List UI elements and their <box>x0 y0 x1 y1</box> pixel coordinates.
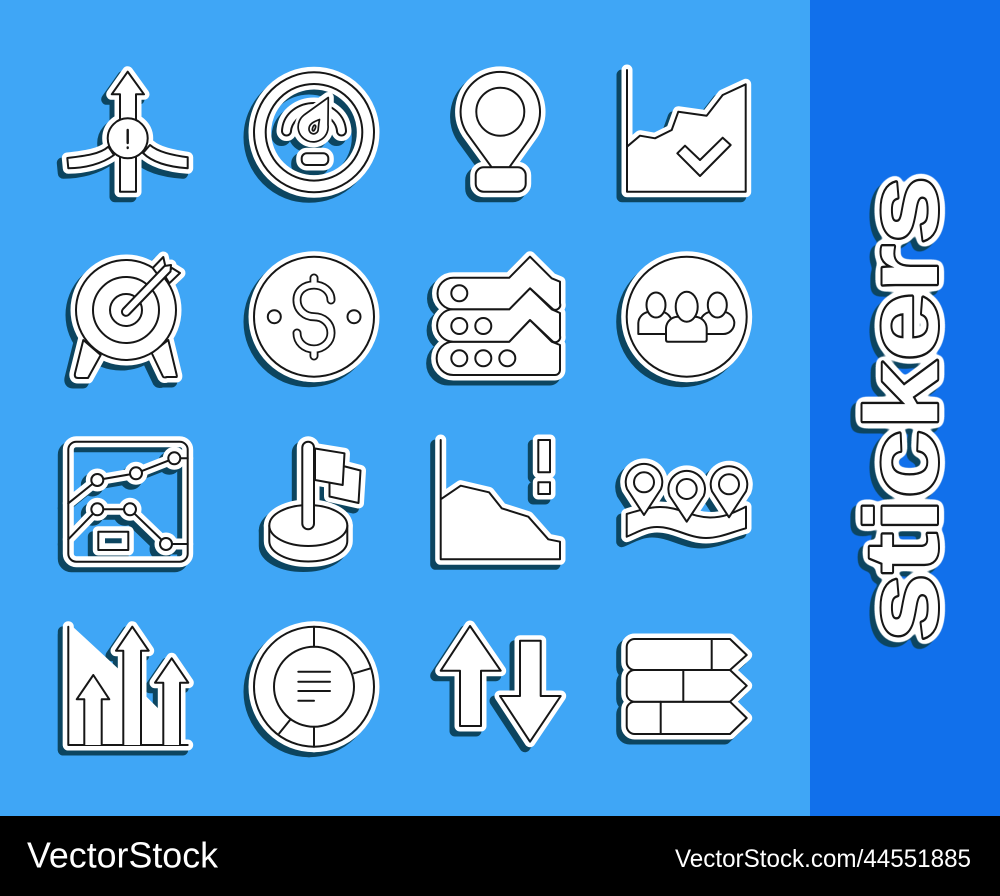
footer brand text: VectorStock <box>27 834 219 876</box>
icon: flag on round base <box>264 442 360 566</box>
icon: target with arrow <box>70 257 180 383</box>
icon: growth chart with three up arrows <box>63 627 188 750</box>
icon: rising area chart with check mark <box>622 70 746 197</box>
footer bar <box>0 816 1000 896</box>
icon: three pins on a map band <box>621 464 747 543</box>
icon: location pin <box>456 72 540 197</box>
icon: team of three people in circle <box>622 257 747 382</box>
title: stickers: stickers <box>844 176 959 642</box>
icon: three stacked tag bars <box>622 639 747 739</box>
footer image id text: VectorStock.com/44551885 <box>675 845 971 873</box>
icon: donut chart with text lines <box>249 627 374 752</box>
icon: line chart in frame <box>63 442 188 567</box>
side panel: dark blue <box>810 0 1000 816</box>
icon: merging road arrow with warning <box>62 72 188 197</box>
background panel: light blue <box>0 0 810 816</box>
icon: dollar coin <box>249 257 374 382</box>
icon: up and down arrows <box>436 626 561 747</box>
icon: falling area chart with exclamation <box>436 440 560 564</box>
icon: gauge inside ring <box>249 72 374 197</box>
icon: stacked server rows with arrows <box>432 257 560 380</box>
